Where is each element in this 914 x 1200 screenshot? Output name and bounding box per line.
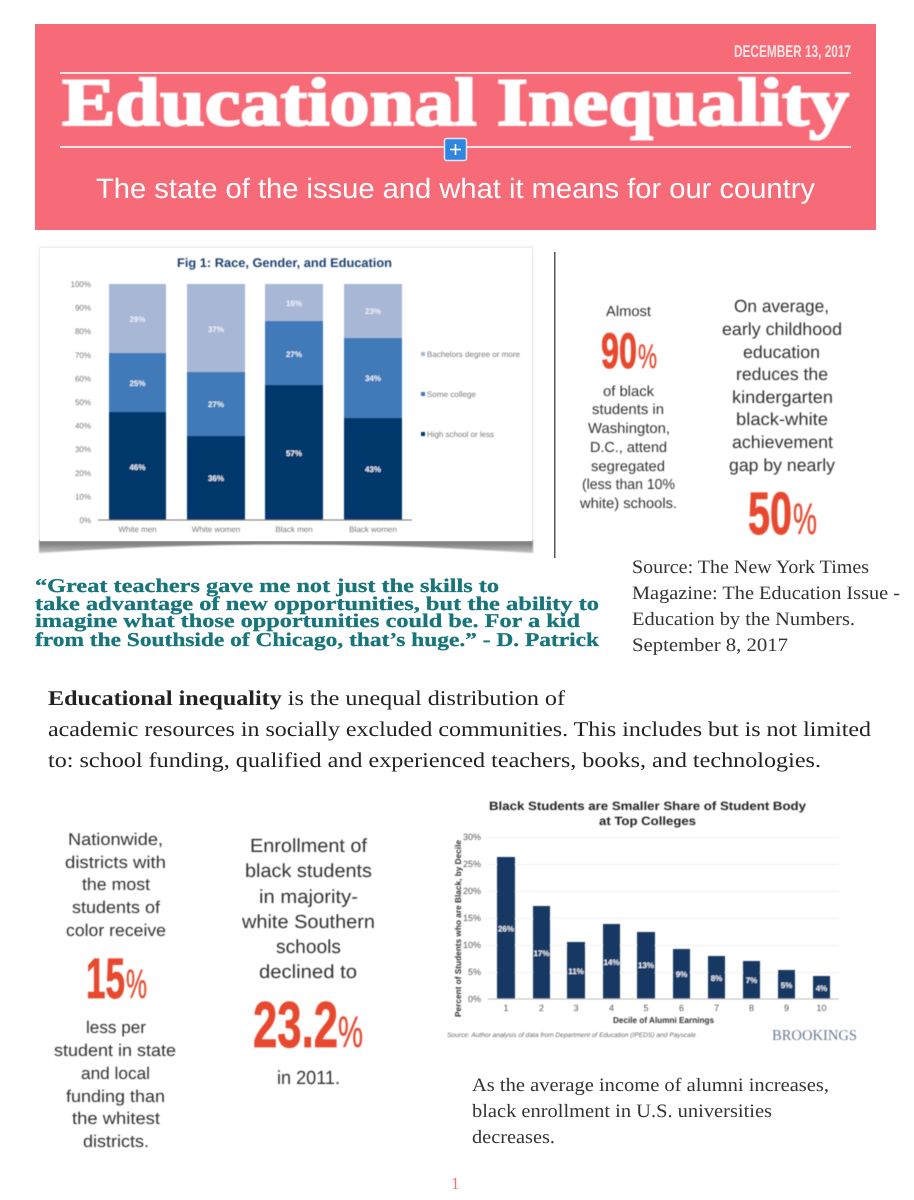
y axis labels: 0% [468, 994, 481, 1004]
x axis labels: 10 [816, 1003, 827, 1013]
subtitle: The state of the issue and what it means for our country [96, 173, 815, 204]
y axis labels: 30% [463, 832, 481, 842]
title: Educational Inequality [62, 64, 849, 140]
chart title: at Top Colleges [599, 814, 696, 828]
x axis labels: Black men [275, 525, 313, 534]
bar value labels: 7% [746, 976, 757, 985]
bar value labels: 9% [676, 970, 687, 979]
y axis labels: 5% [468, 967, 481, 977]
bar: white women: 37% [208, 325, 224, 334]
y axis labels: 60% [75, 374, 91, 383]
stat: 15 percent less funding: color receive [66, 921, 166, 940]
stat: 15 percent less funding [54, 830, 176, 1151]
bar: black men: 16% [286, 299, 302, 308]
bar value labels: 11% [568, 967, 584, 976]
bars [497, 857, 830, 999]
stat: 50 percent achievement gap: education [743, 342, 820, 362]
y axis labels: 10% [463, 940, 481, 950]
x axis labels: White men [118, 525, 157, 534]
chart: black students share by decile [447, 799, 857, 1044]
chart: race, gender and education stacked bars [39, 247, 533, 553]
stat: 50 percent achievement gap: black-white [736, 409, 828, 429]
stat: 15 percent less funding: less per [86, 1018, 146, 1037]
stat: 23.2 percent enrollment: in 2011. [277, 1068, 340, 1089]
bar: black women: 43% [365, 465, 381, 474]
stat: 90 percent segregated: (less than 10% [582, 477, 675, 493]
stat: 90 percent segregated: of black [603, 384, 655, 400]
y axis labels: 20% [463, 886, 481, 896]
source note: September 8, 2017 [632, 635, 788, 656]
bar: black men [265, 284, 323, 520]
bar: black men: 57% [286, 449, 302, 458]
date: DECEMBER 13, 2017 [734, 42, 851, 61]
chart source: Source: Author analysis of data from Department of Education (IPEDS) and Payscale [447, 1032, 696, 1039]
source note: Magazine: The Education Issue - [632, 583, 900, 604]
bar: white women: 36% [208, 474, 224, 483]
chart title: Fig 1: Race, Gender, and Education [177, 256, 392, 270]
stat: 50 percent achievement gap: On average, [734, 296, 829, 316]
stat: 50 percent achievement gap: achievement [732, 432, 833, 452]
quote [35, 576, 599, 651]
x axis labels: 8 [749, 1003, 754, 1013]
bar value labels: 13% [638, 961, 654, 970]
stat: 15 percent less funding: Nationwide, [68, 830, 163, 849]
chart caption [472, 1075, 829, 1148]
legend: Bachelors degree or more [427, 350, 521, 359]
quote: take advantage of new opportunities, but the ability to [35, 594, 599, 615]
x axis labels: Black women [349, 525, 397, 534]
panel: header banner [35, 24, 876, 230]
definition paragraph [48, 686, 872, 772]
bar: black men: 27% [286, 350, 302, 359]
stat: 50 percent achievement gap: reduces the [736, 364, 828, 384]
big number: 15%: 15 [86, 947, 125, 1011]
bar: white women: 27% [208, 400, 224, 409]
y axis labels: 70% [75, 351, 91, 360]
bar value labels: 5% [781, 981, 792, 990]
y axis labels: 100% [71, 280, 91, 289]
stat: 50 percent achievement gap: early childhood [722, 319, 842, 339]
y axis title: Percent of Students who are Black, by Decile [453, 840, 463, 1017]
bar: white women [187, 284, 245, 520]
bar: white men: 46% [129, 463, 146, 472]
stat: 15 percent less funding: districts with [65, 853, 166, 872]
big number: 50%: 50 [748, 480, 792, 547]
legend [421, 350, 521, 439]
bar: white men [109, 284, 166, 520]
bar value labels: 17% [533, 949, 550, 958]
stat: 90 percent segregated: segregated [591, 459, 665, 475]
quote: “Great teachers gave me not just the skills to [35, 576, 499, 597]
big number: 23.2%: 23.2 [253, 988, 338, 1061]
definition paragraph: Educational inequality is the unequal distribution of [48, 686, 565, 710]
bar: white men: 25% [129, 379, 146, 388]
y axis labels: 0% [79, 516, 91, 525]
x axis labels: 5 [643, 1003, 649, 1013]
bar: black women [344, 284, 402, 520]
stat: 23.2 percent enrollment: Enrollment of [250, 836, 368, 857]
y axis labels: 25% [463, 859, 481, 869]
x axis labels: 2 [539, 1003, 544, 1013]
x axis labels: 7 [714, 1003, 719, 1013]
chart title [489, 799, 806, 828]
y axis labels: 40% [75, 422, 91, 431]
legend: High school or less [427, 430, 494, 439]
stat: 23.2 percent enrollment: white Southern [241, 912, 375, 933]
x axis labels: White women [192, 525, 240, 534]
bar: black women: 23% [365, 307, 381, 316]
bar: white men: 29% [129, 315, 146, 324]
bar value labels: 8% [711, 974, 722, 983]
icon: plus button [444, 138, 466, 160]
source note: Education by the Numbers. [632, 609, 855, 630]
x axis labels [503, 1003, 827, 1013]
y axis labels: 90% [75, 304, 91, 313]
stat: 15 percent less funding: funding than [66, 1087, 165, 1106]
x axis labels: 1 [503, 1003, 509, 1013]
chart caption: As the average income of alumni increases, [472, 1075, 829, 1096]
stat: 90 percent segregated [579, 304, 677, 512]
brookings logo: BROOKINGS [772, 1028, 857, 1044]
stat: 23.2 percent enrollment: schools [276, 937, 341, 958]
chart title: Black Students are Smaller Share of Student Body [489, 799, 806, 813]
y axis labels: 20% [75, 469, 91, 478]
chart caption: decreases. [472, 1127, 555, 1148]
y axis labels: 50% [75, 398, 91, 407]
x axis labels: 4 [609, 1003, 614, 1013]
stat: 15 percent less funding: student in state [54, 1041, 176, 1060]
stat: 90 percent segregated: D.C., attend [590, 440, 667, 456]
stat: 23.2 percent enrollment: black students [245, 861, 372, 882]
stat: 15 percent less funding: the whitest [72, 1109, 160, 1128]
y axis labels: 30% [75, 445, 91, 454]
stat: 23.2 percent enrollment: in majority- [259, 887, 358, 908]
quote: from the Southside of Chicago, that’s huge.” - D. Patrick [35, 630, 599, 651]
bar value labels [498, 924, 827, 993]
stat: 23.2 percent enrollment: declined to [259, 962, 357, 983]
stat: 23.2 percent enrollment [241, 836, 375, 1089]
legend: Some college [427, 390, 477, 399]
bar value labels: 26% [498, 924, 514, 934]
stat: 90 percent segregated: white) schools. [579, 496, 677, 512]
big number: 50%: % [793, 495, 817, 544]
stat: 50 percent achievement gap: kindergarten [732, 387, 833, 407]
stat: 50 percent achievement gap [722, 296, 842, 547]
y axis labels: 15% [463, 913, 481, 923]
stat: 15 percent less funding: districts. [83, 1132, 149, 1151]
source note [632, 557, 900, 656]
bar value labels: 14% [603, 958, 620, 967]
x axis title: Decile of Alumni Earnings [613, 1015, 714, 1025]
stat: 15 percent less funding: and local [81, 1064, 150, 1083]
x axis labels: 9 [784, 1003, 789, 1013]
big number: 15%: % [126, 961, 147, 1007]
stat: 90 percent segregated: Washington, [588, 421, 670, 437]
big number: 90%: % [638, 338, 657, 376]
bar value labels: 4% [816, 984, 827, 993]
y axis labels [71, 280, 91, 525]
stat: 50 percent achievement gap: gap by nearly [729, 455, 835, 475]
y axis labels: 80% [75, 327, 91, 336]
stat: 90 percent segregated: students in [592, 402, 664, 418]
x axis labels: 3 [573, 1003, 579, 1013]
stat: 15 percent less funding: the most [82, 875, 150, 894]
page number: 1 [451, 1174, 460, 1193]
source note: Source: The New York Times [632, 557, 869, 578]
stat: 90 percent segregated: Almost [606, 304, 651, 320]
bar: black women: 34% [365, 374, 381, 383]
stat: 15 percent less funding: students of [72, 898, 160, 917]
x axis labels [118, 525, 397, 534]
big number: 90%: 90 [601, 323, 637, 379]
x axis labels: 6 [679, 1003, 684, 1013]
definition paragraph: to: school funding, qualified and experienced teachers, books, and technologies. [48, 748, 821, 772]
big number: 23.2%: % [338, 1008, 363, 1057]
quote: imagine what those opportunities could be. For a kid [35, 611, 580, 632]
definition paragraph: academic resources in socially excluded communities. This includes but is not limited [48, 717, 872, 741]
chart caption: black enrollment in U.S. universities [472, 1101, 772, 1122]
y axis labels: 10% [75, 492, 91, 501]
y axis labels [463, 832, 481, 1004]
